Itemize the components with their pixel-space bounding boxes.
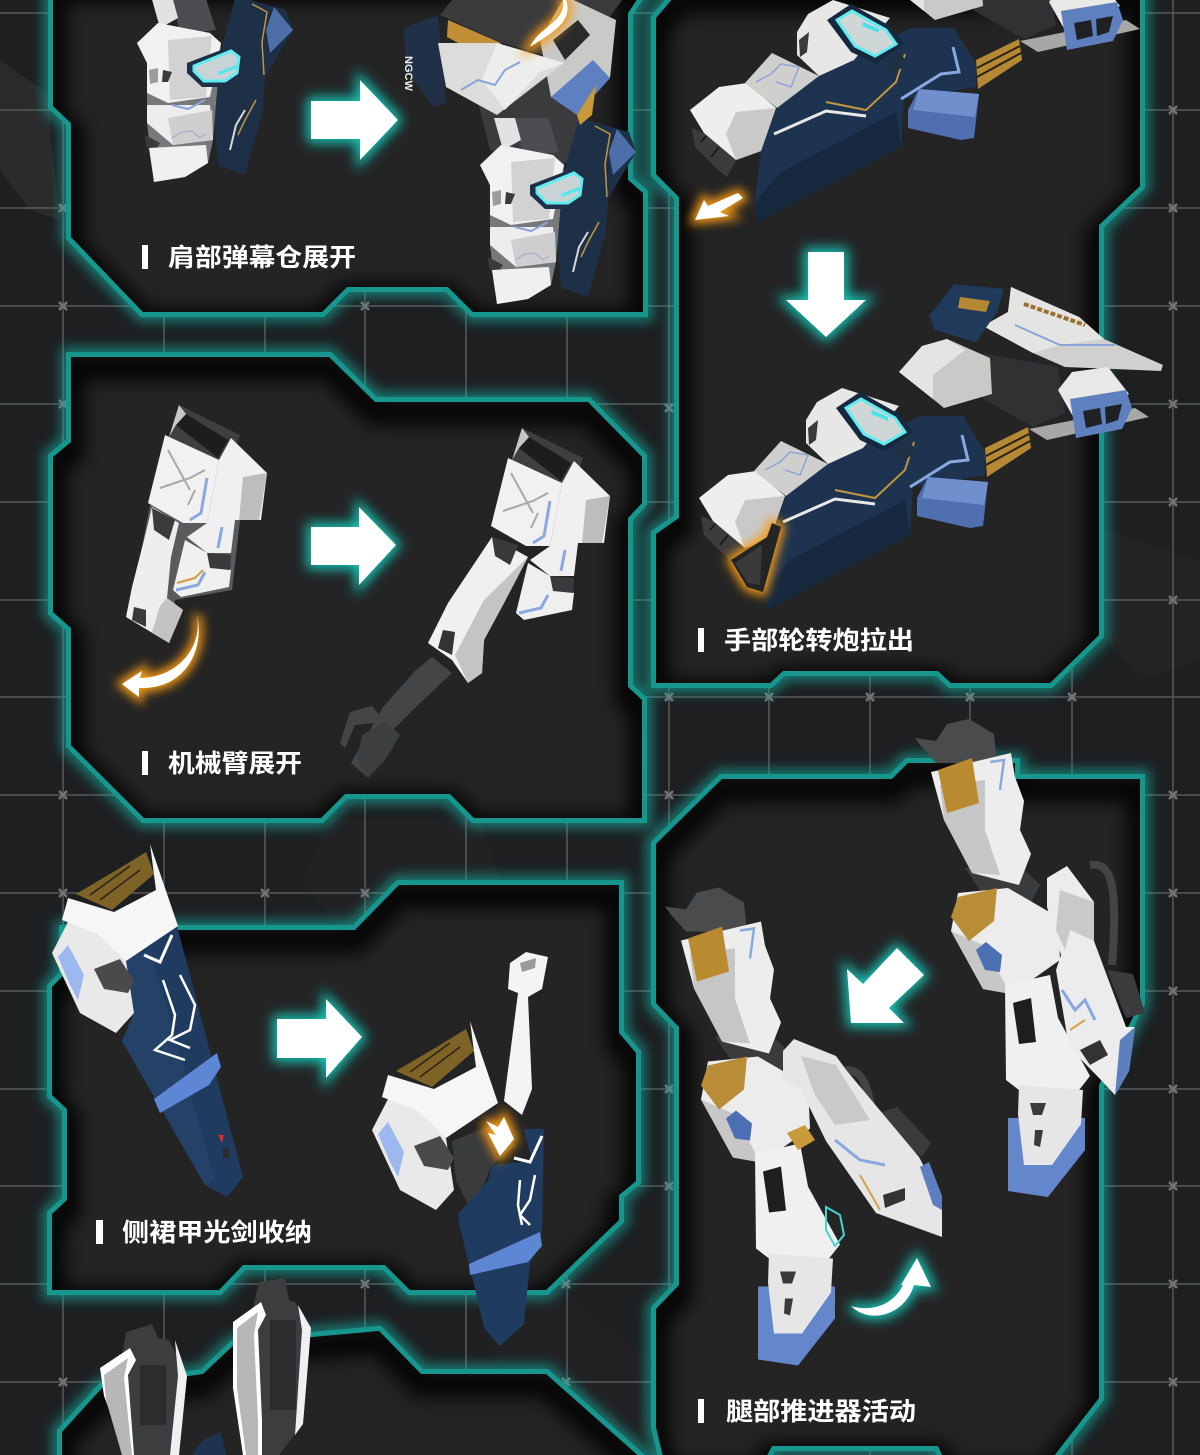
panel: shoulder bay	[53, 0, 650, 322]
bullet and label: skirt armor: 侧裙甲光剑收纳	[122, 1219, 312, 1247]
robot arm after shoulder opening	[402, 0, 636, 304]
panel: hand gatling	[656, 0, 1140, 693]
robot arm after shoulder opening: NGCW	[402, 56, 414, 91]
arrow: shoulder step	[311, 80, 398, 160]
teal curved arrow	[851, 1258, 931, 1316]
arrow: leg diagonal	[847, 948, 924, 1023]
bullet and label: hand gatling: 手部轮转炮拉出	[724, 626, 914, 655]
robot mech after	[699, 284, 1163, 610]
robot arm extended	[340, 428, 610, 778]
arrow: down	[786, 252, 866, 337]
panel: bottom left partial	[62, 1331, 660, 1455]
bullet and label: leg thrusters: 腿部推进器活动	[726, 1398, 916, 1426]
robot arm folded	[126, 405, 267, 643]
arrow: skirt armor step	[277, 999, 362, 1078]
highlighted hand gatling	[731, 523, 781, 592]
robot leg with thruster lowered	[665, 888, 942, 1366]
panel: mechanical arm	[53, 357, 642, 828]
arrow: arm step	[311, 507, 396, 585]
robot mech before	[690, 0, 1154, 222]
panel: leg thrusters	[656, 763, 1140, 1455]
robot scabbard after with saber	[372, 952, 548, 1346]
robot scabbard before	[52, 844, 243, 1197]
robot parts bottom left	[100, 1278, 311, 1455]
orange curved arrow: arm	[122, 615, 199, 697]
robot leg with thruster raised	[915, 719, 1145, 1197]
bullet and label: mechanical arm: 机械臂展开	[168, 750, 302, 778]
orange down arrow: saber	[486, 1117, 514, 1156]
bullet and label: shoulder bay: 肩部弹幕仓展开	[168, 244, 356, 272]
orange swoosh: shoulder	[530, 0, 568, 47]
orange small arrow	[695, 193, 743, 220]
robot arm before shoulder opening	[137, 0, 293, 182]
panel: skirt armor saber	[52, 885, 636, 1300]
